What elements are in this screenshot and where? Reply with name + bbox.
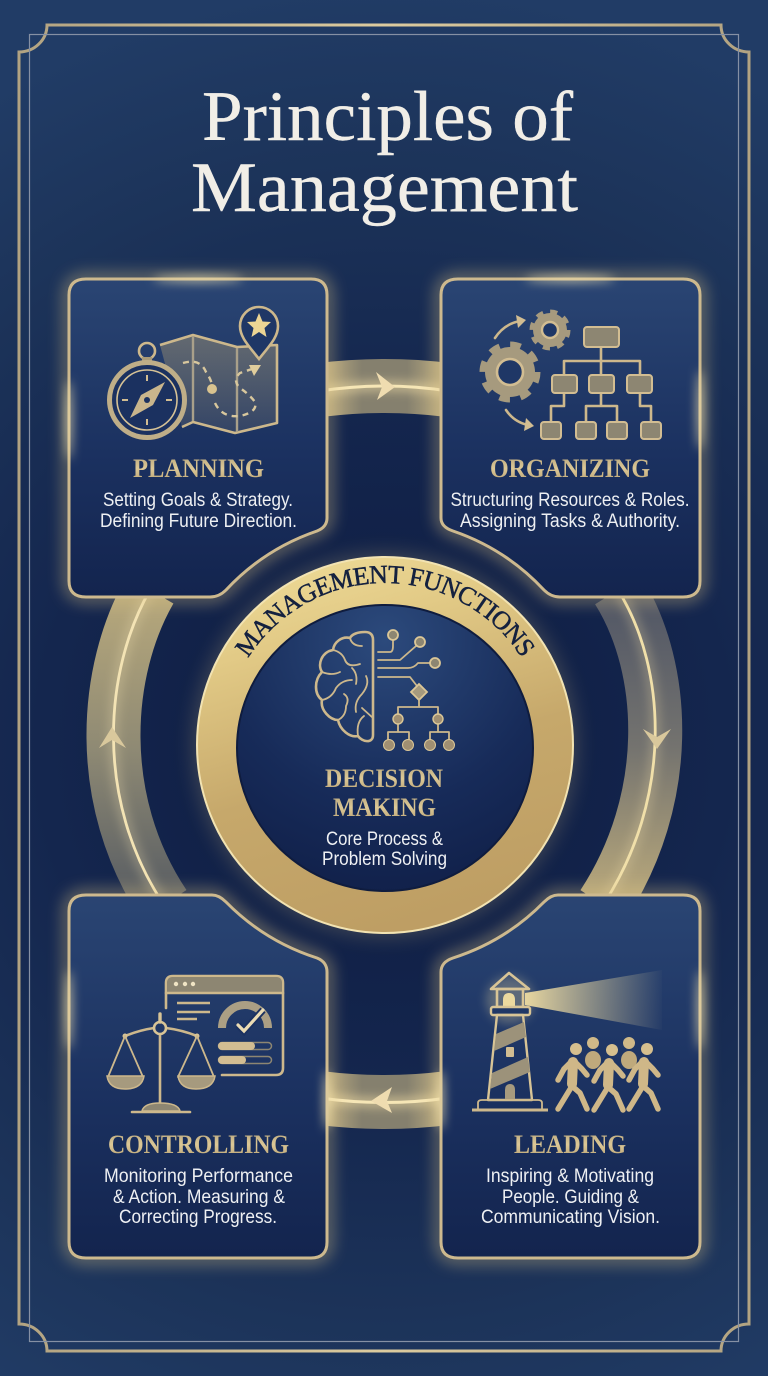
heading: controlling: CONTROLLING <box>108 1130 289 1159</box>
arrow: controlling to planning <box>99 590 164 905</box>
description: decision making <box>322 829 447 870</box>
description: leading: People. Guiding & <box>502 1187 639 1208</box>
title: Management <box>191 149 578 227</box>
panel: organizing <box>441 276 702 597</box>
title <box>191 78 578 227</box>
description: leading: Communicating Vision. <box>481 1207 660 1228</box>
description: controlling: & Action. Measuring & <box>113 1187 285 1208</box>
description: organizing: Structuring Resources & Roles. <box>450 490 690 511</box>
icon: lighthouse and team <box>472 970 662 1110</box>
description: leading <box>481 1166 660 1228</box>
heading: decision making <box>325 764 443 822</box>
icon: scales and dashboard <box>107 976 283 1112</box>
heading: decision making: MAKING <box>333 793 436 822</box>
heading: organizing: ORGANIZING <box>490 454 650 483</box>
arrow: planning to organizing <box>320 372 448 400</box>
center hub: decision making <box>184 544 586 946</box>
heading: decision making: DECISION <box>325 764 443 793</box>
heading: planning: PLANNING <box>133 454 264 483</box>
arrow: organizing to leading <box>603 590 671 905</box>
description: organizing: Assigning Tasks & Authority. <box>460 511 680 532</box>
title: Principles of <box>202 78 573 156</box>
icon: gears and org chart <box>483 312 661 439</box>
description: planning: Defining Future Direction. <box>100 511 297 532</box>
description: planning: Setting Goals & Strategy. <box>103 490 293 511</box>
panel: controlling <box>66 895 330 1258</box>
description: controlling: Correcting Progress. <box>119 1207 277 1228</box>
description: controlling <box>104 1166 293 1228</box>
panel: leading <box>438 895 702 1258</box>
arrow: leading to controlling <box>320 1087 448 1113</box>
icon: brain and decision tree <box>316 630 454 750</box>
description: leading: Inspiring & Motivating <box>486 1166 654 1187</box>
description: decision making: Core Process & <box>326 829 443 850</box>
heading: leading: LEADING <box>514 1130 626 1159</box>
description: planning <box>100 490 297 532</box>
description: controlling: Monitoring Performance <box>104 1166 293 1187</box>
curved label: management functions: MANAGEMENT FUNCTIONS <box>234 566 534 658</box>
description: organizing <box>450 490 690 532</box>
panel: planning <box>66 276 327 597</box>
icon: compass and map <box>110 307 278 438</box>
description: decision making: Problem Solving <box>322 849 447 870</box>
